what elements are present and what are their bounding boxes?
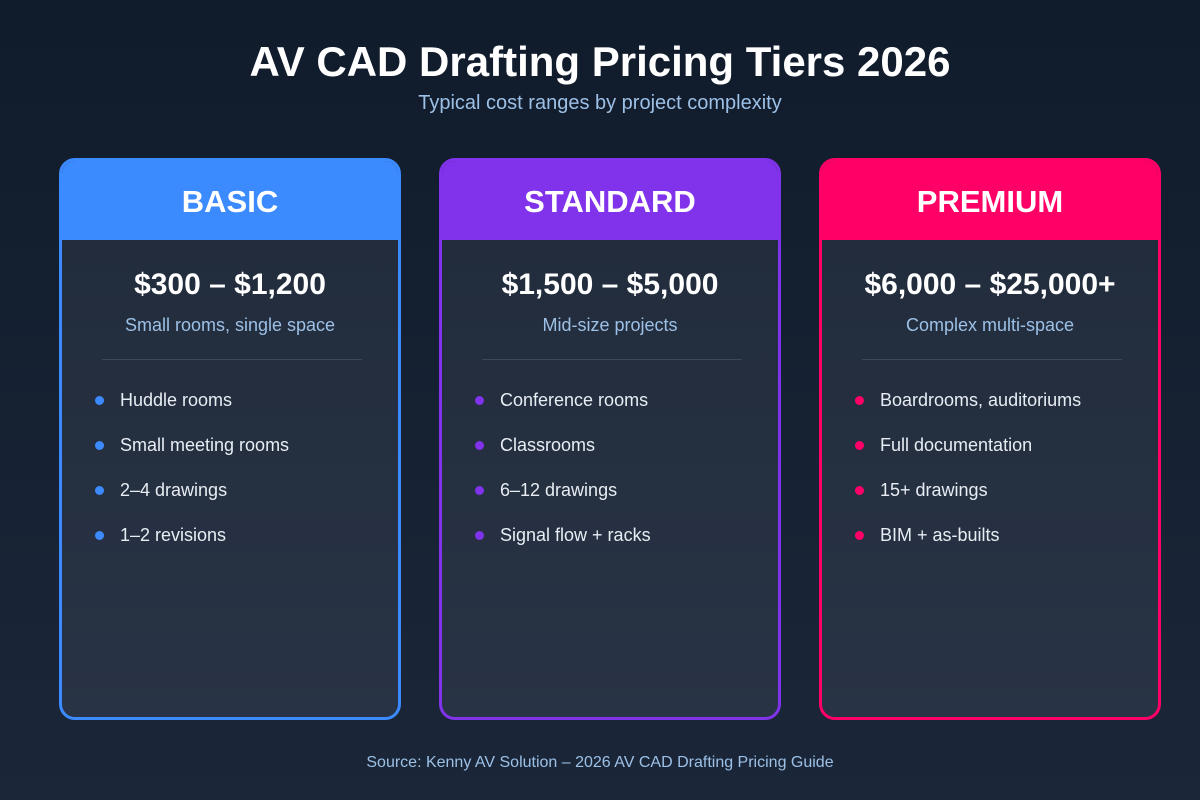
title: AV CAD Drafting Pricing Tiers 2026 (250, 38, 950, 85)
list: basic features: 1–2 revisions (120, 525, 226, 545)
price: premium: $6,000 – $25,000+ (864, 268, 1116, 301)
list: premium features: Full documentation (880, 435, 1032, 455)
list: basic features (95, 390, 289, 545)
panel: basic (59, 158, 401, 720)
heading: basic (59, 158, 401, 240)
panel: premium (819, 158, 1161, 720)
heading: premium (819, 158, 1161, 240)
heading: premium: PREMIUM (917, 184, 1063, 219)
heading: standard (439, 158, 781, 240)
panel: standard (439, 158, 781, 720)
list: basic features: Huddle rooms (120, 390, 232, 410)
heading: basic: BASIC (182, 184, 278, 219)
description: standard: Mid-size projects (542, 315, 678, 335)
list: premium features (855, 390, 1081, 545)
list: basic features: 2–4 drawings (120, 480, 227, 500)
subtitle: Typical cost ranges by project complexity (418, 92, 782, 114)
list: premium features: 15+ drawings (880, 480, 988, 500)
list: standard features (475, 390, 651, 545)
description: basic: Small rooms, single space (125, 315, 335, 335)
source footer: Source: Kenny AV Solution – 2026 AV CAD Drafting Pricing Guide (366, 754, 834, 771)
price: standard: $1,500 – $5,000 (502, 268, 718, 301)
list: premium features: BIM + as-builts (880, 525, 1000, 545)
list: standard features: Conference rooms (500, 390, 648, 410)
description: premium: Complex multi-space (906, 315, 1074, 335)
list: premium features: Boardrooms, auditoriums (880, 390, 1081, 410)
list: basic features: Small meeting rooms (120, 435, 289, 455)
list: standard features: Classrooms (500, 435, 595, 455)
list: standard features: 6–12 drawings (500, 480, 617, 500)
price: basic: $300 – $1,200 (134, 268, 326, 301)
list: standard features: Signal flow + racks (500, 525, 651, 545)
heading: standard: STANDARD (524, 184, 696, 219)
